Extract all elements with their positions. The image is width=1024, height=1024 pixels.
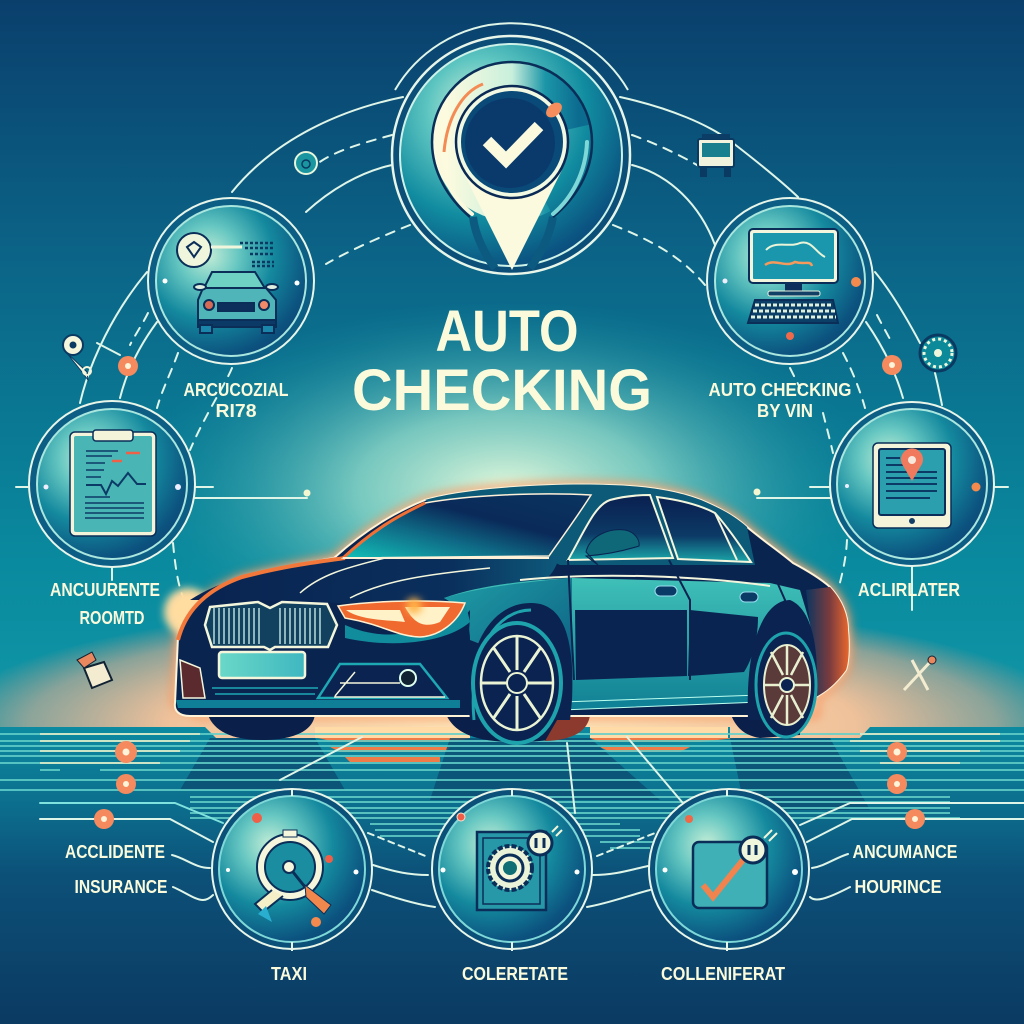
front wheel arch [469, 603, 572, 720]
fascia panel [177, 610, 470, 700]
rear quarter [806, 587, 849, 697]
title: CHECKING [352, 358, 652, 423]
windows [568, 495, 673, 560]
icon: clipboard [70, 430, 156, 536]
labels [50, 380, 960, 984]
rear wheel [748, 600, 817, 720]
labels: ACCLIDENTE [65, 842, 165, 862]
labels: TAXI [271, 964, 307, 984]
bumper strip [176, 700, 460, 708]
labels: ANCUMANCE [852, 842, 958, 862]
icon: document with gear [477, 826, 562, 910]
icon: map pin [432, 62, 592, 270]
mirror [586, 530, 639, 565]
panel: bottom-center gear [432, 789, 592, 951]
labels: HOURINCE [854, 877, 942, 897]
lower intake [318, 664, 447, 698]
labels: COLLENIFERAT [661, 964, 785, 984]
icon: check mark [487, 126, 539, 160]
car glow [175, 485, 849, 715]
small icon: truck [698, 134, 734, 177]
door handles [655, 586, 677, 596]
labels: ANCUURENTE [50, 580, 160, 600]
grille [205, 602, 337, 650]
title [352, 299, 652, 423]
panel: top-left car [148, 198, 314, 364]
orange nodes [94, 355, 925, 829]
tires [207, 705, 800, 742]
icon: magnifier with tool [255, 830, 331, 922]
icon: key tag [177, 233, 275, 267]
car [164, 485, 849, 743]
small icon: location pin left [63, 335, 91, 380]
windshield [343, 494, 591, 558]
panel: top pin check [392, 23, 630, 274]
labels: INSURANCE [74, 877, 168, 897]
labels: ARCUCOZIAL [184, 380, 288, 400]
hood [190, 556, 560, 603]
small icon: tools [904, 656, 936, 690]
panel: right tablet [830, 402, 994, 566]
icon: monitor [748, 229, 838, 323]
panel: bottom-left magnifier [212, 789, 372, 951]
connector lines [16, 97, 1024, 907]
labels: ROOMTD [80, 608, 144, 628]
car body [175, 485, 849, 716]
front wheel [473, 623, 561, 743]
water floor with reflection [0, 727, 1024, 1024]
panel: bottom-right check box [649, 789, 809, 951]
roof band [425, 485, 755, 565]
number plate [219, 652, 305, 678]
small icon: apple badge [295, 152, 317, 174]
icon: check box [693, 830, 777, 908]
small icon: wheel badge [920, 335, 956, 371]
icon: car front [194, 272, 278, 333]
labels: AUTO CHECKING [708, 380, 852, 400]
labels: RI78 [216, 401, 256, 421]
panel: top-right computer [707, 198, 873, 364]
title: AUTO [436, 299, 578, 364]
small icon: paint bucket [77, 652, 112, 688]
panel: left clipboard [29, 401, 195, 567]
labels: BY VIN [757, 401, 813, 421]
icon: tablet [873, 443, 951, 528]
labels: ACLIRLATER [858, 580, 960, 600]
headlight [338, 598, 465, 637]
door and fender panels [444, 578, 815, 702]
labels: COLERETATE [462, 964, 568, 984]
headlight glow left [164, 588, 212, 636]
